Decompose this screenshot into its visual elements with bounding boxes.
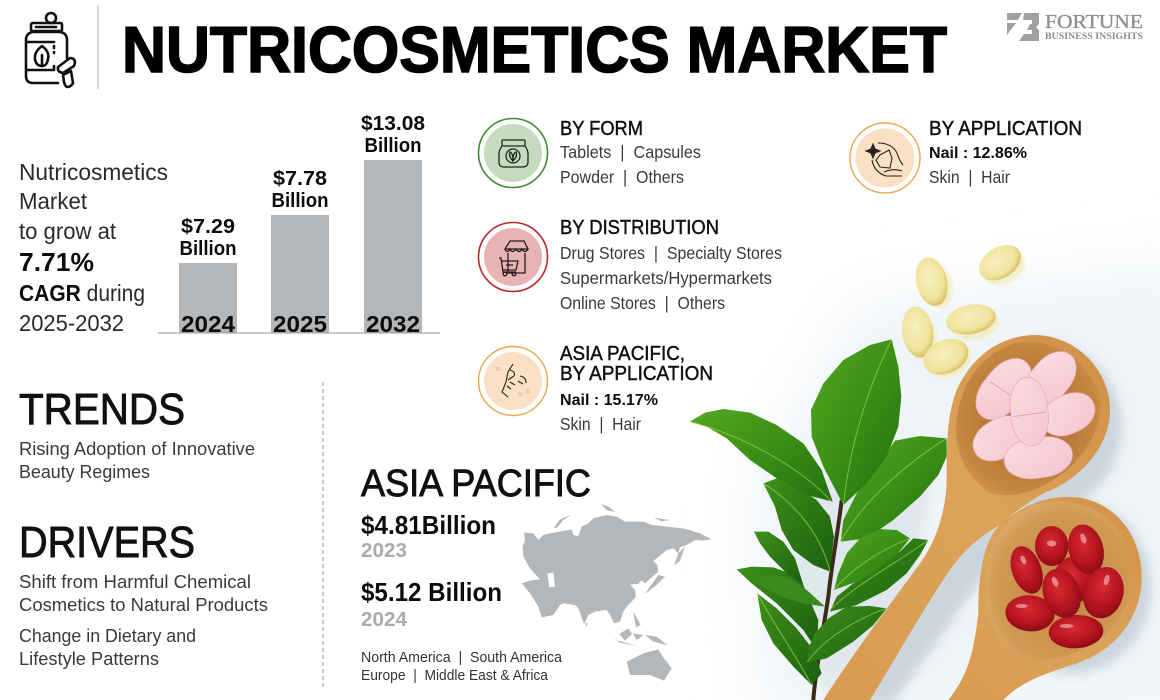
photo: leaves, spoons and capsules	[690, 238, 1160, 700]
drivers section: Lifestyle Patterns	[19, 649, 159, 669]
header divider	[97, 5, 99, 89]
drivers section: Shift from Harmful Chemical	[19, 572, 251, 592]
Asia Pacific by application text	[560, 343, 713, 434]
by application text: BY APPLICATION	[929, 118, 1082, 140]
by form text: Tablets | Capsules	[560, 142, 701, 162]
by form text: BY FORM	[560, 118, 643, 140]
drivers section	[19, 518, 268, 669]
icon: supplement jar with capsules	[26, 13, 75, 87]
icon: by form jar	[478, 118, 548, 188]
CAGR text block: 7.71%	[19, 247, 94, 277]
upper wooden spoon	[823, 335, 1110, 700]
CAGR text block: Nutricosmetics	[19, 159, 168, 185]
by form text: Powder | Others	[560, 167, 684, 187]
title: NUTRICOSMETICS MARKET	[122, 13, 947, 86]
icon: by application hair and face	[850, 123, 920, 193]
by application text: Skin | Hair	[929, 167, 1010, 187]
bar chart: market size: $7.78	[273, 168, 327, 190]
CAGR text block: Market	[19, 188, 88, 214]
Asia Pacific by application text: BY APPLICATION	[560, 363, 713, 385]
by application text: Nail : 12.86%	[929, 145, 1027, 162]
CAGR text block: to grow at	[19, 218, 117, 244]
icon: by distribution storefront and cart	[478, 222, 548, 292]
logo: Fortune Business Insights: FORTUNE	[1045, 12, 1143, 33]
drivers section: DRIVERS	[19, 518, 195, 567]
Asia Pacific heading and values: North America | South America	[361, 649, 563, 666]
by form text	[560, 118, 701, 187]
Asia Pacific by application text: ASIA PACIFIC,	[560, 343, 685, 365]
Asia Pacific heading and values: $4.81Billion	[361, 510, 496, 540]
CAGR text block	[19, 159, 168, 336]
Asia Pacific heading and values: 2024	[361, 609, 408, 631]
by distribution text: Drug Stores | Specialty Stores	[560, 243, 782, 263]
bar chart: market size: 2032	[366, 311, 420, 337]
bar chart: market size: Billion	[180, 238, 236, 260]
CAGR text block: CAGR during	[19, 280, 145, 306]
bar chart: market size: 2024	[181, 311, 235, 337]
drivers section: Cosmetics to Natural Products	[19, 595, 268, 615]
logo: Fortune Business Insights	[1007, 12, 1143, 42]
leaf sprig	[690, 339, 947, 700]
Asia Pacific by application text: Nail : 15.17%	[560, 392, 658, 409]
icon: Asia Pacific face	[478, 346, 548, 416]
map: Asia Pacific	[522, 504, 712, 681]
pink tablets	[966, 342, 1102, 483]
Asia Pacific by application text: Skin | Hair	[560, 414, 641, 434]
soft backdrop glow	[750, 260, 1160, 700]
shadows	[780, 342, 1152, 700]
bar chart: market size: Billion	[272, 190, 328, 212]
Asia Pacific heading and values: ASIA PACIFIC	[361, 463, 591, 505]
Asia Pacific heading and values: $5.12 Billion	[361, 577, 502, 607]
logo: Fortune Business Insights: BUSINESS INSIGHTS	[1045, 32, 1143, 42]
bar chart: market size: Billion	[364, 135, 422, 157]
by distribution text: Supermarkets/Hypermarkets	[560, 268, 772, 288]
lower wooden spoon	[948, 497, 1142, 700]
CAGR text block: 2025-2032	[19, 310, 124, 336]
drivers section: Change in Dietary and	[19, 626, 196, 646]
by application text	[929, 118, 1082, 187]
by distribution text	[560, 217, 782, 313]
yellow capsules	[899, 238, 1031, 385]
by distribution text: Online Stores | Others	[560, 293, 725, 313]
Asia Pacific heading and values: Europe | Middle East & Africa	[361, 667, 549, 684]
trends section: Rising Adoption of Innovative	[19, 439, 255, 459]
Asia Pacific heading and values: 2023	[361, 540, 407, 562]
bar chart: market size: $13.08	[361, 113, 425, 135]
trends section: Beauty Regimes	[19, 462, 150, 482]
bar chart: market size: $7.29	[181, 216, 235, 238]
Asia Pacific heading and values	[361, 463, 591, 684]
bar chart: market size	[158, 113, 440, 337]
trends section	[19, 385, 255, 482]
bar chart: market size: 2025	[273, 311, 327, 337]
by distribution text: BY DISTRIBUTION	[560, 217, 719, 239]
red softgels	[1004, 520, 1129, 650]
trends section: TRENDS	[19, 385, 185, 434]
